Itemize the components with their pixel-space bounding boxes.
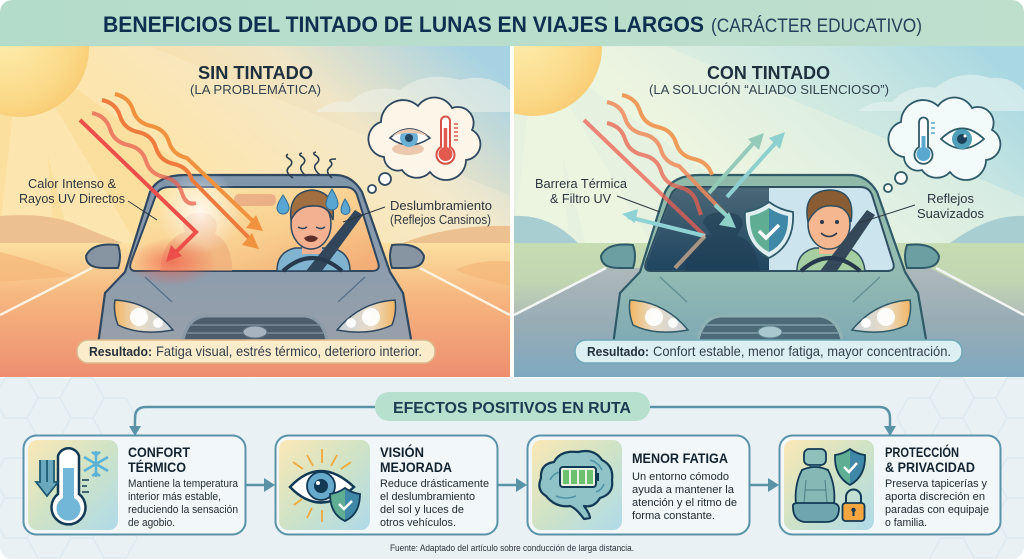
card: proteccion y privacidad — [780, 436, 1000, 534]
hood lines — [145, 277, 365, 302]
windshield — [130, 187, 379, 271]
rays and reflections — [584, 95, 785, 268]
card text: reduciendo la sensación — [128, 504, 238, 516]
result pill: Resultado: — [89, 344, 152, 359]
windshield tinted half — [646, 188, 769, 270]
label: calor intenso: Rayos UV Directos — [19, 191, 125, 206]
mirrors — [601, 244, 939, 268]
interior glare and heat — [163, 174, 238, 250]
sun rays — [638, 46, 1024, 243]
card text: MENOR FATIGA — [632, 451, 728, 466]
clouds — [858, 75, 1024, 111]
windshield light half — [645, 187, 894, 271]
mirrors — [86, 244, 424, 268]
sweat drops — [277, 189, 350, 214]
car — [601, 175, 939, 345]
result pill: Resultado: — [587, 344, 649, 359]
label: reflejos — [859, 191, 984, 223]
card text: forma constante. — [632, 510, 715, 522]
steering wheel — [283, 258, 342, 271]
card text: & PRIVACIDAD — [885, 460, 975, 475]
bottom section background — [0, 378, 1024, 559]
subtitle: (CARÁCTER EDUCATIVO) — [711, 16, 922, 37]
seatbelt — [306, 210, 363, 271]
heading pill: efectos positivos: EFECTOS POSITIVOS EN RUTA — [393, 400, 631, 417]
card text: aporta discreción en — [885, 491, 985, 503]
label: deslumbramiento — [342, 200, 492, 226]
result pill — [575, 340, 962, 363]
panel: con tintado — [514, 46, 1024, 377]
seatbelt — [820, 210, 875, 271]
title band — [0, 0, 1024, 46]
card text: de agobio. — [128, 517, 175, 529]
thought bubble: eye and heat — [368, 97, 480, 193]
label: barrera termica: Barrera Térmica — [535, 176, 628, 191]
heading pill: efectos positivos — [375, 392, 650, 421]
label: calor intenso: Calor Intenso & — [28, 176, 116, 191]
card text — [380, 445, 489, 529]
card text: otros vehículos. — [380, 517, 456, 529]
card text: Preserva tapicerías y — [885, 478, 987, 490]
seats — [685, 212, 760, 271]
card text: Reduce drásticamente — [380, 478, 489, 490]
sky — [514, 46, 1024, 246]
label: reflejos: Reflejos — [927, 191, 974, 206]
card text: MEJORADA — [380, 460, 452, 475]
heading: (LA PROBLEMÁTICA) — [190, 82, 321, 97]
body — [613, 175, 927, 345]
arrow: card 1 to card 2 — [246, 478, 275, 492]
result pill: Confort estable, menor fatiga, mayor concentración. — [653, 344, 951, 359]
headlights — [629, 300, 688, 332]
headlights — [114, 300, 173, 332]
hood lines — [660, 277, 880, 302]
card text: atención y el ritmo de — [632, 497, 737, 509]
card text: VISIÓN — [380, 445, 424, 460]
card text: Un entorno cómodo — [632, 471, 729, 483]
icon: eye with shield — [290, 449, 360, 522]
steering wheel — [801, 258, 860, 271]
rear view mirror — [234, 194, 276, 206]
card text: TÉRMICO — [128, 460, 186, 475]
icon: thermometer with snowflake — [36, 448, 108, 524]
thought bubble: thermometer and eye — [884, 97, 1000, 192]
driver — [277, 189, 363, 271]
body — [98, 175, 412, 345]
label: deslumbramiento: Deslumbramiento — [390, 198, 492, 213]
road lines — [514, 268, 1024, 315]
heading: CON TINTADO — [707, 63, 830, 83]
card text: CONFORT — [128, 445, 191, 460]
road lines — [0, 268, 510, 315]
label: deslumbramiento: (Reflejos Cansinos) — [390, 212, 491, 227]
icon: brain with battery — [539, 451, 612, 519]
source footnote: Fuente: Adaptado del artículo sobre conducción de larga distancia. — [390, 543, 634, 554]
card: menor fatiga — [528, 436, 750, 534]
card text: o familia. — [885, 517, 927, 529]
card text: Mantiene la temperatura — [128, 478, 239, 490]
ground — [0, 243, 510, 378]
card text: paradas con equipaje — [885, 504, 989, 516]
heat rays — [80, 94, 263, 262]
road — [514, 268, 1024, 378]
card text — [885, 445, 989, 529]
label: calor intenso — [19, 176, 157, 220]
result pill: Fatiga visual, estrés térmico, deterioro interior. — [156, 344, 422, 359]
sun rays — [2, 46, 510, 243]
title: BENEFICIOS DEL TINTADO DE LUNAS EN VIAJES LARGOS — [103, 12, 704, 37]
heading — [190, 66, 320, 96]
side fields — [514, 243, 1024, 318]
car — [86, 170, 424, 345]
result pill — [77, 340, 435, 363]
heading: SIN TINTADO — [198, 63, 313, 83]
card: confort termico — [24, 436, 246, 534]
heading — [649, 63, 889, 97]
card text — [632, 451, 737, 522]
sky — [0, 46, 510, 246]
sun — [514, 46, 602, 116]
card text: PROTECCIÓN — [885, 445, 959, 460]
clouds — [316, 77, 512, 112]
passenger seat — [160, 212, 232, 271]
sun — [0, 46, 89, 117]
hills — [514, 216, 1024, 243]
panel: sin tintado — [0, 46, 510, 377]
arrow: heading to last card — [650, 407, 896, 436]
dunes — [0, 215, 510, 244]
card text — [128, 445, 239, 529]
card text: ayuda a mantener la — [632, 484, 735, 496]
heading: (LA SOLUCIÓN “ALIADO SILENCIOSO”) — [649, 82, 889, 97]
arrow: heading to first card — [129, 407, 375, 436]
label: reflejos: Suavizados — [917, 206, 984, 221]
shield — [745, 202, 793, 258]
card text: el deslumbramiento — [380, 491, 475, 503]
label: barrera termica — [535, 176, 660, 212]
card text: interior más estable, — [128, 491, 221, 503]
icon: seat, shield and lock — [793, 449, 865, 522]
card text: del sol y luces de — [380, 504, 464, 516]
grille — [182, 314, 328, 340]
arrow: card 3 to card 4 — [750, 478, 779, 492]
label: barrera termica: & Filtro UV — [550, 191, 611, 206]
grille — [697, 316, 843, 345]
arrow: card 2 to card 3 — [498, 478, 527, 492]
steam squiggles — [286, 152, 336, 178]
driver — [797, 190, 875, 271]
card: vision mejorada — [276, 436, 498, 534]
